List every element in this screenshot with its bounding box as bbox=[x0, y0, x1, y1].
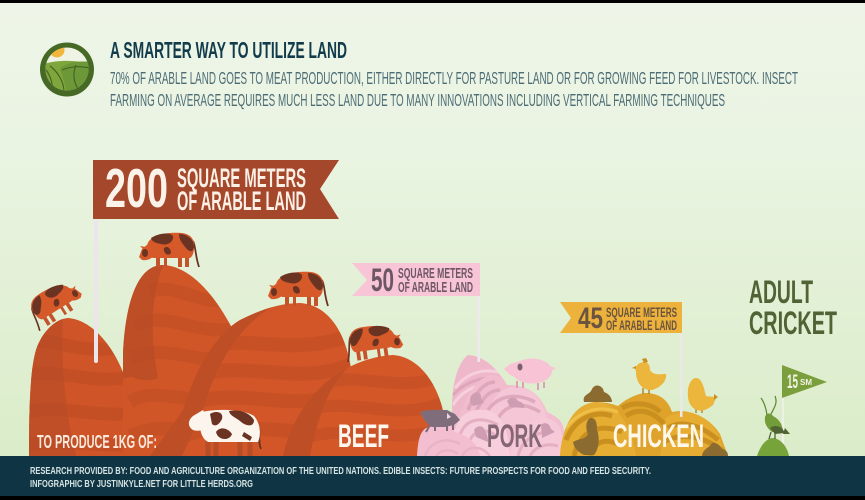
hill 1 bbox=[29, 318, 123, 456]
pink pig bbox=[504, 358, 556, 390]
flag: 15 SM bbox=[782, 365, 827, 398]
cow: middle hill bbox=[268, 272, 328, 306]
label: to produce: TO PRODUCE 1KG OF: bbox=[37, 432, 157, 452]
flag pole: 200 bbox=[94, 219, 98, 363]
flag pole: 45 bbox=[680, 333, 682, 417]
body text bbox=[110, 68, 798, 110]
flag: 50 square meters bbox=[352, 262, 480, 298]
footer bbox=[0, 456, 865, 500]
flag: 50 square meters: SQUARE METERS bbox=[398, 266, 473, 282]
hill 2 bbox=[123, 265, 231, 452]
cricket hill bbox=[757, 438, 789, 456]
white cow bbox=[189, 410, 261, 456]
dome: left bbox=[560, 402, 636, 456]
flag pole: 50 bbox=[478, 296, 480, 362]
cow: left hill bbox=[23, 275, 87, 331]
flag: 45 square meters bbox=[560, 302, 682, 335]
chicken hills bbox=[556, 385, 731, 460]
label: beef: BEEF bbox=[338, 418, 389, 454]
grey pig bbox=[420, 410, 460, 432]
cow: right hill bbox=[344, 322, 404, 362]
cow: tall hill bbox=[139, 233, 199, 267]
flag: 200 square meters bbox=[93, 157, 339, 219]
hill 3 bbox=[150, 303, 351, 456]
icon: farm field badge bbox=[40, 42, 94, 96]
flag pole: 15 bbox=[782, 397, 784, 447]
label: pork: PORK bbox=[487, 418, 542, 454]
flag: 200 square meters: SQUARE METERS bbox=[177, 163, 306, 193]
flag: 45 square meters: SQUARE METERS bbox=[606, 304, 677, 320]
adult cricket heading: ADULT bbox=[749, 274, 813, 310]
label: chicken: CHICKEN bbox=[613, 418, 704, 454]
flag: 50 square meters: 50 bbox=[371, 262, 394, 298]
flag: 200 square meters: OF ARABLE LAND bbox=[177, 186, 306, 216]
adult cricket heading bbox=[749, 274, 837, 341]
silhouette chicken bbox=[573, 418, 599, 455]
hill 4 bbox=[283, 355, 443, 456]
title: A SMARTER WAY TO UTILIZE LAND bbox=[110, 37, 347, 63]
flag: 45 square meters: 45 bbox=[578, 302, 603, 335]
footer: INFOGRAPHIC BY JUSTINKYLE.NET FOR LITTLE HERDS.ORG bbox=[30, 478, 253, 490]
dome: right bbox=[660, 413, 710, 456]
beef hills bbox=[20, 260, 450, 460]
flag: 15 SM: SM bbox=[800, 378, 812, 387]
cricket bbox=[761, 396, 790, 439]
flag: 50 square meters: OF ARABLE LAND bbox=[398, 280, 473, 296]
chicken: right bbox=[688, 378, 718, 413]
flag: 200 square meters: 200 bbox=[105, 157, 168, 219]
flag: 45 square meters: OF ARABLE LAND bbox=[606, 317, 677, 333]
dome: middle bbox=[618, 393, 672, 412]
pork hills bbox=[417, 355, 564, 456]
flag: 15 SM: 15 bbox=[787, 372, 798, 393]
chicken: top bbox=[632, 358, 666, 394]
